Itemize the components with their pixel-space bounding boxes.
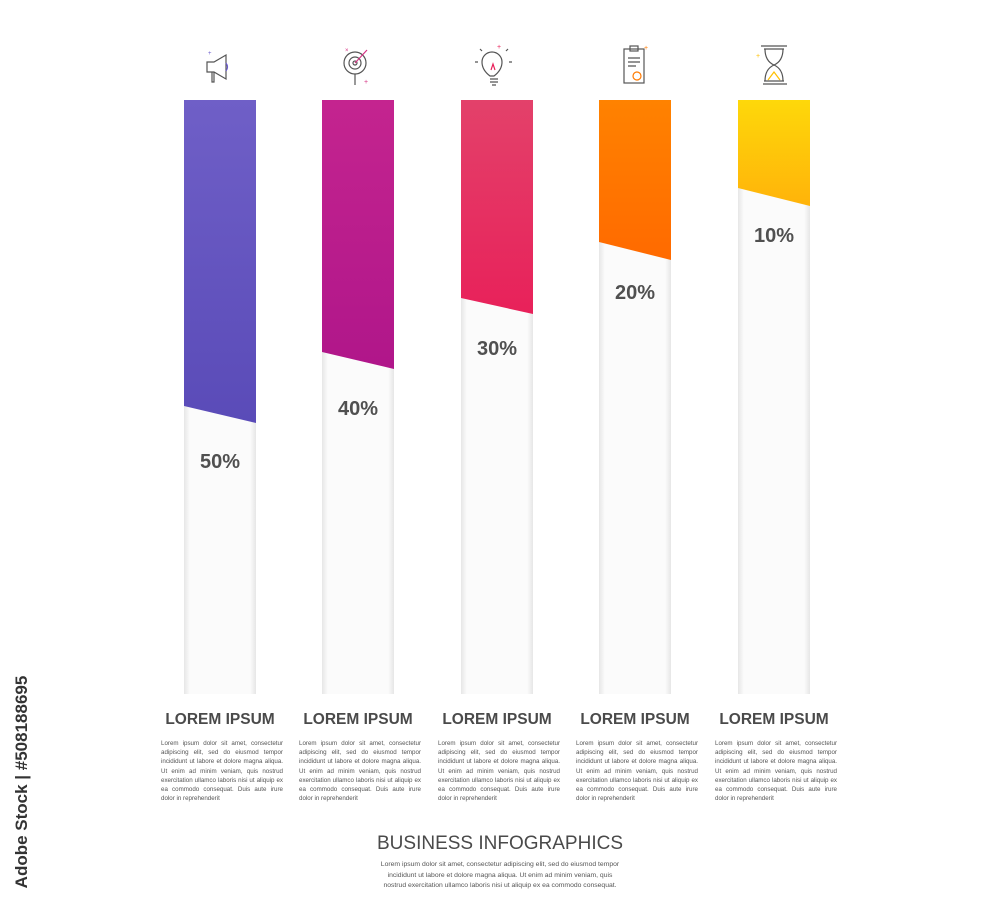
icon: target: × xyxy=(345,48,349,54)
text: adipiscing elit, sed do eiusmod tempor xyxy=(161,749,283,756)
text: ea commodo consequat. Duis aute irure xyxy=(299,786,421,793)
text: exercitation ullamco laboris nisi ut aliquip ex xyxy=(438,777,560,784)
text: Lorem ipsum dolor sit amet, consectetur xyxy=(161,740,283,747)
text: 20% xyxy=(615,282,655,304)
icon: light bulb: + xyxy=(497,44,501,51)
icon: target: + xyxy=(364,79,368,86)
text: 10% xyxy=(754,225,794,247)
text: dolor in reprehenderit xyxy=(715,795,774,802)
watermark id: Adobe Stock | #508188695 xyxy=(12,676,31,888)
text: Lorem ipsum dolor sit amet, consectetur xyxy=(715,740,837,747)
text: incididunt ut labore et dolore magna aliqua. xyxy=(576,758,698,765)
text: exercitation ullamco laboris nisi ut aliquip ex xyxy=(161,777,283,784)
text: LOREM IPSUM xyxy=(165,711,275,728)
icon: clipboard: + xyxy=(644,45,648,52)
text: Lorem ipsum dolor sit amet, consectetur xyxy=(299,740,421,747)
icon: target xyxy=(344,48,368,86)
text: Ut enim ad minim veniam, quis nostrud xyxy=(161,768,283,775)
text: incididunt ut labore et dolore magna aliqua. xyxy=(161,758,283,765)
text: ea commodo consequat. Duis aute irure xyxy=(715,786,837,793)
bar 5 xyxy=(738,100,810,694)
text: incididunt ut labore et dolore magna aliqua. xyxy=(715,758,837,765)
text: adipiscing elit, sed do eiusmod tempor xyxy=(299,749,421,756)
text: LOREM IPSUM xyxy=(303,711,413,728)
text: Ut enim ad minim veniam, quis nostrud xyxy=(299,768,421,775)
text: incididunt ut labore et dolore magna aliqua. xyxy=(438,758,560,765)
text: adipiscing elit, sed do eiusmod tempor xyxy=(715,749,837,756)
text blocks xyxy=(161,740,837,802)
text: 30% xyxy=(477,338,517,360)
text: Ut enim ad minim veniam, quis nostrud xyxy=(576,768,698,775)
text: adipiscing elit, sed do eiusmod tempor xyxy=(576,749,698,756)
bar 4 xyxy=(599,100,671,694)
bar 2 xyxy=(322,100,394,694)
text: ea commodo consequat. Duis aute irure xyxy=(438,786,560,793)
text: adipiscing elit, sed do eiusmod tempor xyxy=(438,749,560,756)
icon: megaphone xyxy=(207,51,228,82)
text: dolor in reprehenderit xyxy=(438,795,497,802)
percent labels xyxy=(200,225,794,473)
title: BUSINESS INFOGRAPHICS xyxy=(377,833,623,854)
text: exercitation ullamco laboris nisi ut aliquip ex xyxy=(576,777,698,784)
subtitle text: incididunt ut labore et dolore magna aliqua. Ut enim ad minim veniam, quis xyxy=(388,872,612,878)
text: exercitation ullamco laboris nisi ut aliquip ex xyxy=(715,777,837,784)
headings xyxy=(165,711,829,728)
subtitle text xyxy=(381,861,620,889)
text: LOREM IPSUM xyxy=(719,711,829,728)
text: dolor in reprehenderit xyxy=(576,795,635,802)
icon: clipboard xyxy=(624,45,648,83)
icon: megaphone: + xyxy=(208,51,212,57)
text: ea commodo consequat. Duis aute irure xyxy=(161,786,283,793)
icon: light bulb xyxy=(475,44,512,85)
text: exercitation ullamco laboris nisi ut aliquip ex xyxy=(299,777,421,784)
subtitle text: Lorem ipsum dolor sit amet, consectetur adipiscing elit, sed do eiusmod tempor xyxy=(381,861,619,868)
icon: hourglass xyxy=(756,46,787,84)
text: dolor in reprehenderit xyxy=(161,795,220,802)
subtitle text: nostrud exercitation ullamco laboris nisi ut aliquip ex ea commodo consequat. xyxy=(383,882,617,889)
text: incididunt ut labore et dolore magna aliqua. xyxy=(299,758,421,765)
text: LOREM IPSUM xyxy=(442,711,552,728)
text: dolor in reprehenderit xyxy=(299,795,358,802)
text: 40% xyxy=(338,398,378,420)
text: Ut enim ad minim veniam, quis nostrud xyxy=(438,768,560,775)
text: 50% xyxy=(200,451,240,473)
text: Lorem ipsum dolor sit amet, consectetur xyxy=(576,740,698,747)
text: ea commodo consequat. Duis aute irure xyxy=(576,786,698,793)
bar 3 xyxy=(461,100,533,694)
text: LOREM IPSUM xyxy=(580,711,690,728)
text: Lorem ipsum dolor sit amet, consectetur xyxy=(438,740,560,747)
icon: hourglass: + xyxy=(756,53,760,60)
bar 1 xyxy=(184,100,256,694)
text: Ut enim ad minim veniam, quis nostrud xyxy=(715,768,837,775)
